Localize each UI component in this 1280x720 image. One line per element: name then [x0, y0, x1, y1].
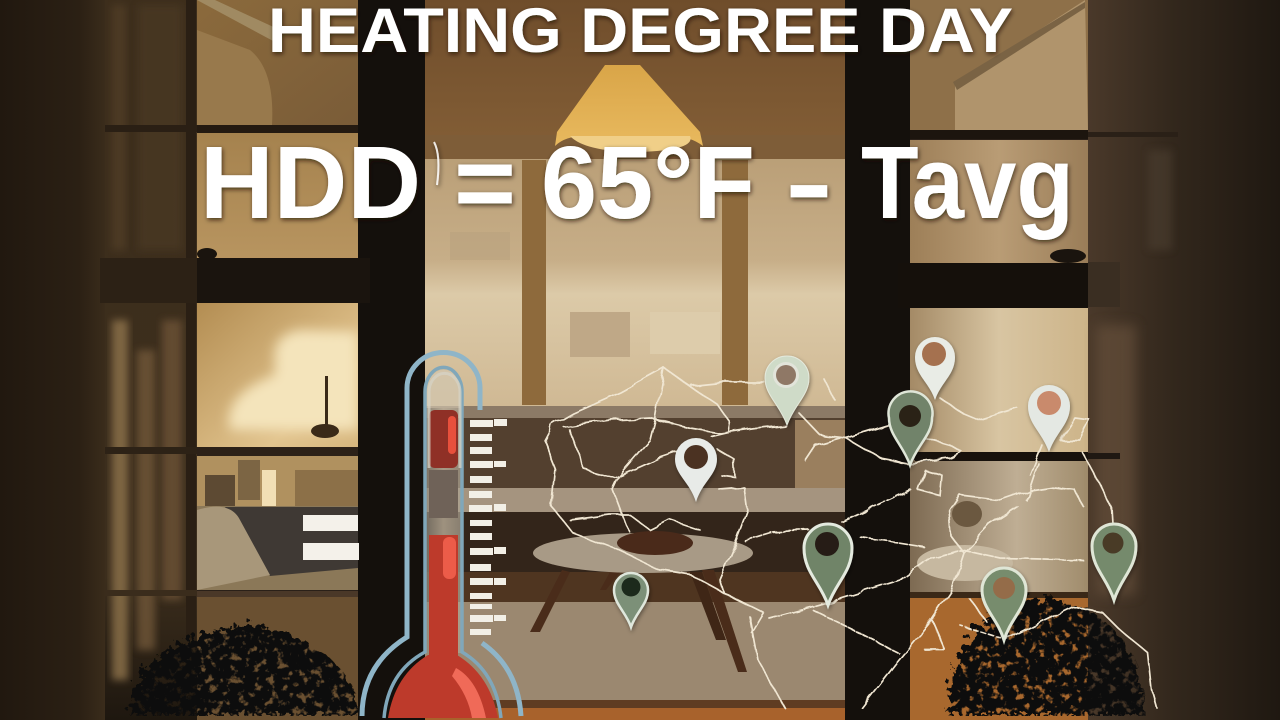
map pin: large green lower centre [804, 524, 852, 605]
map pin: green lower right [982, 568, 1026, 640]
map pin: white far right [1028, 385, 1070, 452]
right window interior [910, 0, 1088, 720]
map pin: pale green top centre [765, 356, 809, 425]
map pin: green far right [1092, 524, 1136, 600]
formula: = [454, 125, 516, 240]
map pin: white centre [675, 438, 717, 502]
formula: - [785, 125, 833, 240]
plants [130, 598, 1145, 716]
coffee table [530, 531, 753, 672]
map outline network [544, 368, 1157, 708]
map pin: small green by table [614, 573, 648, 627]
formula: 65°F [541, 125, 755, 240]
formula: HDD [200, 125, 421, 240]
map pin: white top right [915, 337, 955, 400]
left curtain [0, 0, 197, 720]
formula [200, 125, 1074, 240]
map pin: dark green centre right [889, 391, 932, 465]
formula: Tavg [861, 125, 1074, 240]
thermometer [362, 353, 521, 718]
equals sign [303, 515, 359, 560]
left window interior [197, 0, 358, 720]
right curtain [1088, 0, 1280, 720]
sofa [425, 406, 845, 572]
ceiling lamp [555, 65, 703, 152]
thermometer scale ticks [469, 419, 507, 635]
window frames [195, 0, 1100, 720]
